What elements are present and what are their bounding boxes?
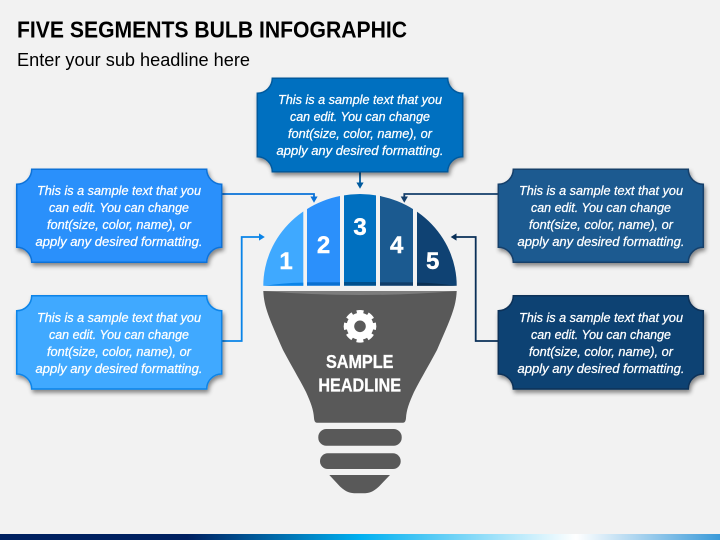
arrow: box 5 to segment 5 xyxy=(451,233,498,341)
text box 5: lower right: apply any desired formatting. xyxy=(518,362,684,376)
text box 2: upper left: font(size, color, name), or xyxy=(47,218,192,232)
text box 4: upper right: This is a sample text that you xyxy=(519,184,683,198)
text box 2: upper left: can edit. You can change xyxy=(49,201,189,215)
text box 3: top: This is a sample text that you xyxy=(278,93,442,107)
segment 3 xyxy=(344,190,376,286)
connector arrows xyxy=(222,172,498,341)
subtitle: Enter your sub headline here xyxy=(17,49,250,70)
icon: gear xyxy=(342,309,378,344)
bulb body xyxy=(260,290,460,424)
arrow: box 3 to segment 3 xyxy=(356,172,364,189)
segment 2 xyxy=(307,190,340,286)
bulb headline: HEADLINE xyxy=(318,376,401,396)
segment 2: 2 xyxy=(317,232,330,259)
text box 4: upper right: font(size, color, name), or xyxy=(529,218,674,232)
text box 1: lower left xyxy=(17,296,222,389)
text box 5: lower right: can edit. You can change xyxy=(531,328,671,342)
footer gradient bar xyxy=(0,534,720,540)
segment 1: 1 xyxy=(279,248,293,275)
text box 2: upper left: This is a sample text that you xyxy=(37,184,201,198)
text box 4: upper right: apply any desired formatting. xyxy=(518,235,684,249)
segment 1 xyxy=(263,212,304,286)
arrow: box 1 to segment 1 xyxy=(222,233,265,341)
arrow: box 4 to segment 4 xyxy=(401,194,498,203)
arrow: box 2 to segment 2 xyxy=(222,194,318,203)
text box 1: lower left: apply any desired formatting. xyxy=(36,362,202,376)
text box 3: top: font(size, color, name), or xyxy=(288,127,433,141)
bulb base xyxy=(318,429,402,493)
text box 3: top xyxy=(257,78,463,172)
text box 5: lower right: font(size, color, name), or xyxy=(529,345,674,359)
text box 1: lower left: font(size, color, name), or xyxy=(47,345,192,359)
segment 5: 5 xyxy=(426,248,439,275)
text box 2: upper left xyxy=(17,169,222,262)
bulb headline: SAMPLE xyxy=(326,352,393,372)
segment 4 xyxy=(380,190,413,286)
segment 4: 4 xyxy=(390,232,404,259)
bulb headline xyxy=(318,352,401,396)
text box 1: lower left: This is a sample text that you xyxy=(37,311,201,325)
text box 5: lower right: This is a sample text that you xyxy=(519,311,683,325)
text box 3: top: can edit. You can change xyxy=(290,110,430,124)
text box 5: lower right xyxy=(498,296,703,389)
segment 5 xyxy=(417,212,457,286)
segment 3: 3 xyxy=(353,214,367,241)
title: FIVE SEGMENTS BULB INFOGRAPHIC xyxy=(17,16,407,42)
bulb dome segments xyxy=(263,190,457,286)
text box 3: top: apply any desired formatting. xyxy=(276,144,444,158)
text box 4: upper right: can edit. You can change xyxy=(531,201,671,215)
text box 4: upper right xyxy=(498,169,703,262)
text box 2: upper left: apply any desired formatting. xyxy=(36,235,202,249)
text box 1: lower left: can edit. You can change xyxy=(49,328,189,342)
